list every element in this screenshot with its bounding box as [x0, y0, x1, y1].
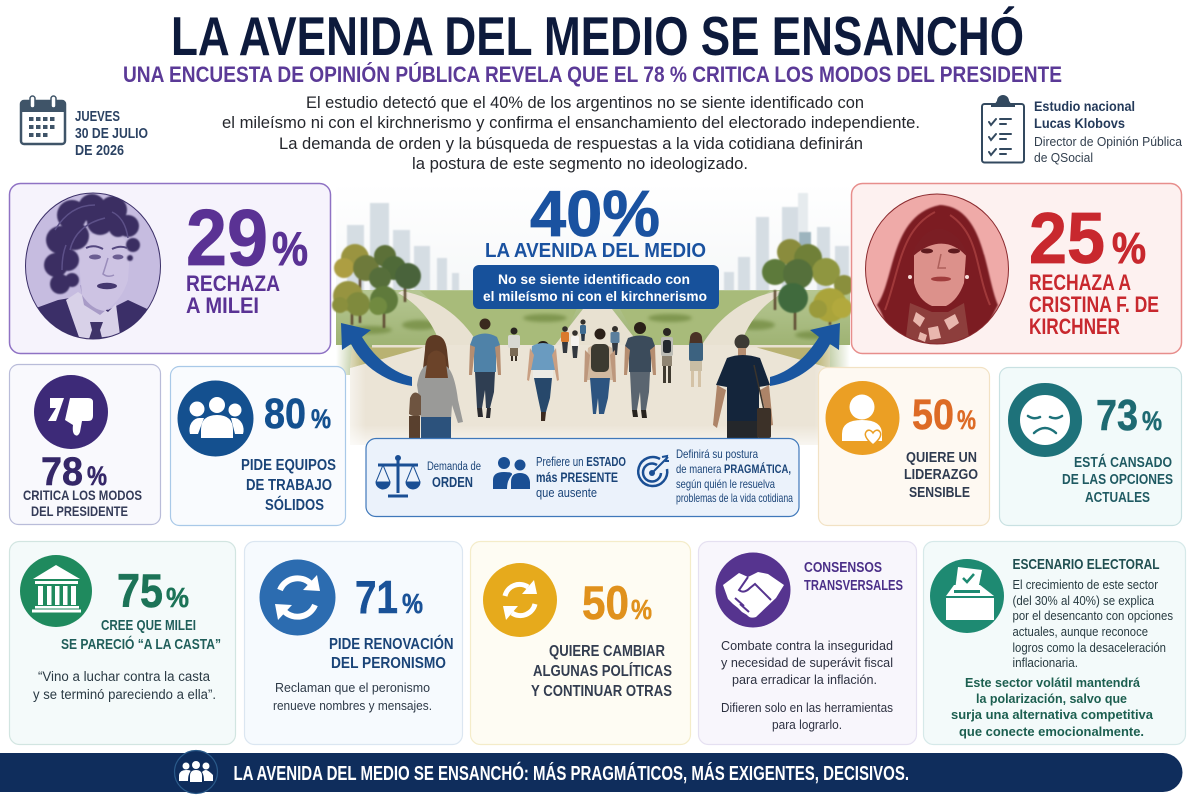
- date text: 30 DE JULIO: [75, 126, 148, 142]
- date text: JUEVES: [75, 109, 120, 125]
- label: [1062, 454, 1173, 506]
- ground: [350, 345, 830, 445]
- text: pragmatica: [676, 447, 793, 505]
- text: pragmatica: Definirá su postura: [676, 447, 758, 461]
- label: rechaza a Cristina: CRISTINA F. DE: [1029, 292, 1159, 317]
- conclusion text: surja una alternativa competitiva: [951, 707, 1154, 722]
- label: Y CONTINUAR OTRAS: [531, 683, 672, 700]
- icon: scales: [376, 456, 420, 496]
- large woman in foreground: [409, 335, 463, 439]
- label: [61, 617, 221, 653]
- label: la avenida del medio: LA AVENIDA DEL MEDIO: [485, 240, 706, 262]
- icon: team: [178, 380, 254, 456]
- body text: Difieren solo en las herramientas: [721, 701, 893, 715]
- label: rechaza a Milei: [186, 271, 280, 318]
- source text: [1034, 98, 1183, 165]
- intro text: [222, 94, 920, 173]
- label: QUIERE CAMBIAR: [549, 643, 665, 660]
- stat: 50%: 50: [912, 391, 954, 439]
- text: estado: [536, 455, 626, 500]
- icon: target: [638, 456, 669, 486]
- portrait: Milei: [25, 190, 161, 345]
- stat: 40%: 40%: [530, 177, 660, 250]
- mid-ground man in blue: [469, 318, 501, 418]
- stat: 75%: %: [166, 582, 189, 613]
- panel: 80% equipos: [170, 366, 346, 526]
- label: rechaza a Cristina: KIRCHNER: [1029, 314, 1120, 339]
- quote: [33, 669, 216, 702]
- panel: consensos transversales: [698, 542, 916, 744]
- icon: sad face: [1014, 389, 1076, 451]
- text: estado: Prefiere un ESTADO: [536, 455, 626, 469]
- callout: no se siente identificado: No se siente identificado con: [498, 271, 690, 287]
- stat: 80%: 80: [264, 390, 306, 438]
- body text: El crecimiento de este sector: [1012, 578, 1158, 592]
- label: [241, 457, 336, 514]
- body text: por el desencanto con opciones: [1012, 609, 1173, 623]
- stat: 78%: 78: [41, 450, 83, 494]
- quote: y se terminó pareciendo a ella”.: [33, 687, 216, 702]
- source text: Director de Opinión Pública: [1034, 134, 1183, 149]
- panel: 78% critica: [10, 364, 160, 524]
- body text: renueve nombres y mensajes.: [273, 699, 432, 713]
- source text: Lucas Klobovs: [1034, 115, 1125, 131]
- left trees: [332, 244, 421, 328]
- label: ACTUALES: [1085, 490, 1150, 506]
- label: [23, 487, 142, 519]
- stat: 73%: %: [1142, 406, 1162, 436]
- label: DE LAS OPCIONES: [1062, 472, 1173, 488]
- roads: [398, 291, 482, 350]
- stat: 29%: %: [272, 222, 308, 275]
- icon: institution: [20, 555, 92, 627]
- body text: Combate contra la inseguridad: [721, 638, 893, 653]
- stat: 25%: %: [1112, 224, 1146, 273]
- text: estado: que ausente: [536, 486, 597, 500]
- intro text: el mileísmo ni con el kirchnerismo y confirma el ensanchamiento del electorado independiente.: [222, 114, 920, 132]
- body text: (del 30% al 40%) se explica: [1012, 594, 1154, 608]
- label: SE PARECIÓ “A LA CASTA”: [61, 635, 221, 653]
- label: SENSIBLE: [909, 485, 970, 501]
- panel: demandas del segmento: [366, 438, 799, 516]
- source text: de QSocial: [1034, 150, 1093, 165]
- label: DEL PRESIDENTE: [31, 503, 128, 519]
- icon: people: [493, 457, 530, 489]
- conclusion text: la polarización, salvo que: [976, 691, 1127, 706]
- stat: 50%: %: [957, 405, 976, 435]
- label: SÓLIDOS: [265, 496, 324, 514]
- label: DEL PERONISMO: [331, 655, 446, 672]
- label: rechaza a Cristina: RECHAZA A: [1029, 270, 1131, 295]
- stat: 78%: %: [87, 461, 107, 491]
- stat: 71%: %: [402, 588, 423, 619]
- icon: group: [174, 750, 218, 794]
- text: orden: [427, 461, 481, 491]
- source block: [982, 96, 1183, 165]
- body text: para lograrlo.: [772, 718, 842, 732]
- panel: 71% renovacion: [244, 542, 462, 744]
- heading: TRANSVERSALES: [804, 578, 903, 594]
- body text: [1012, 578, 1173, 670]
- stat: 50%: %: [631, 594, 652, 625]
- right trees: [762, 239, 854, 330]
- label: DE TRABAJO: [246, 477, 332, 494]
- label: rechaza a Cristina: [1029, 270, 1159, 339]
- stat: 75%: 75: [117, 564, 163, 617]
- panel: rechazo a Cristina: [852, 184, 1182, 354]
- intro text: la postura de este segmento no ideologizado.: [412, 155, 748, 173]
- label: CREE QUE MILEI: [101, 617, 196, 634]
- body text: Reclaman que el peronismo: [275, 681, 430, 695]
- woman in denim shirt: [527, 341, 559, 421]
- date block: [21, 96, 148, 159]
- conclusion text: Este sector volátil mantendrá: [965, 675, 1141, 690]
- stat: 50%: 50: [582, 576, 629, 629]
- heading: CONSENSOS: [804, 560, 882, 576]
- meadow: [336, 290, 850, 375]
- label: CRITICA LOS MODOS: [23, 487, 142, 503]
- arrow: to Cristina: [770, 323, 840, 386]
- body text: inflacionaria.: [1012, 656, 1078, 670]
- body text: y necesidad de superávit fiscal: [721, 655, 893, 670]
- body text: para erradicar la inflación.: [732, 672, 877, 687]
- icon: handshake: [716, 552, 790, 628]
- panel: escenario electoral: [924, 542, 1186, 744]
- intro text: La demanda de orden y la búsqueda de respuestas a la vida cotidiana definirán: [279, 135, 863, 153]
- small distant people: [508, 319, 703, 387]
- label: [531, 643, 672, 700]
- conclusion text: que conecte emocionalmente.: [959, 724, 1144, 739]
- callout: no se siente identificado: [473, 265, 719, 309]
- panel: rechazo a Milei: [10, 184, 330, 354]
- body text: logros como la desaceleración: [1012, 641, 1166, 655]
- text: orden: ORDEN: [432, 475, 473, 491]
- man in dark shirt: [624, 322, 656, 418]
- text: pragmatica: problemas de la vida cotidiana: [676, 491, 793, 505]
- stat: 80%: %: [311, 404, 331, 434]
- source text: Estudio nacional: [1034, 98, 1135, 114]
- heading: ESCENARIO ELECTORAL: [1012, 556, 1160, 573]
- icon: calendar: [21, 96, 65, 144]
- icon: ballot box: [930, 559, 1004, 633]
- date text: DE 2026: [75, 143, 124, 159]
- panel: 75% casta: [10, 542, 236, 744]
- icon: thumbs down: [34, 375, 108, 449]
- callout: no se siente identificado: el mileísmo ni con el kirchnerismo: [483, 288, 707, 304]
- body text: [273, 681, 432, 713]
- text: pragmatica: de manera PRAGMÁTICA,: [676, 461, 791, 476]
- label: PIDE EQUIPOS: [241, 457, 336, 474]
- label: rechaza a Milei: RECHAZA: [186, 271, 280, 296]
- label: QUIERE UN: [906, 450, 977, 466]
- label: LIDERAZGO: [904, 467, 978, 483]
- skyline: [347, 193, 849, 291]
- text: orden: Demanda de: [427, 461, 481, 473]
- panel: 73% cansado: [1000, 368, 1182, 526]
- stat: 71%: 71: [355, 571, 398, 623]
- intro text: El estudio detectó que el 40% de los argentinos no se siente identificado con: [306, 94, 864, 112]
- stat: 25%: [1029, 199, 1146, 279]
- icon: clipboard: [982, 96, 1024, 162]
- text: estado: más PRESENTE: [536, 469, 618, 485]
- label: rechaza a Milei: A MILEI: [186, 293, 259, 318]
- subtitle: UNA ENCUESTA DE OPINIÓN PÚBLICA REVELA QUE EL 78 % CRITICA LOS MODOS DEL PRESIDENTE: [123, 62, 1062, 87]
- label: ALGUNAS POLÍTICAS: [533, 663, 672, 680]
- footer text: LA AVENIDA DEL MEDIO SE ENSANCHÓ: MÁS PRAGMÁTICOS, MÁS EXIGENTES, DECISIVOS.: [234, 761, 909, 785]
- icon: cycle arrows: [483, 563, 557, 637]
- portrait: Cristina: [865, 194, 1009, 345]
- conclusion text: [951, 675, 1154, 739]
- label: ESTÁ CANSADO: [1074, 454, 1172, 471]
- headline: 40%: [473, 177, 719, 309]
- icon: renewal arrows: [260, 560, 336, 636]
- date text: [75, 109, 148, 159]
- panel: 50% cambiar: [470, 542, 690, 744]
- icon: person with heart: [826, 381, 900, 455]
- stat: 73%: 73: [1096, 391, 1138, 440]
- label: [904, 450, 978, 501]
- body text: actuales, aunque reconoce: [1012, 625, 1148, 639]
- label: PIDE RENOVACIÓN: [329, 634, 454, 653]
- person with backpack: [584, 328, 616, 414]
- heading: [804, 560, 903, 594]
- text: pragmatica: según quién le resuelva: [676, 477, 775, 491]
- panel: 50% liderazgo: [818, 368, 990, 526]
- stat: 29%: 29: [186, 193, 268, 282]
- large man in foreground: [713, 334, 773, 439]
- label: [329, 634, 454, 672]
- central illustration: avenue with people: [332, 183, 854, 455]
- stat: 78%: [41, 450, 107, 494]
- footer banner: [0, 750, 1182, 794]
- stat: 25%: 25: [1029, 199, 1105, 279]
- quote: “Vino a luchar contra la casta: [38, 669, 210, 684]
- body text: [721, 638, 893, 732]
- arrow: to Milei: [341, 323, 412, 386]
